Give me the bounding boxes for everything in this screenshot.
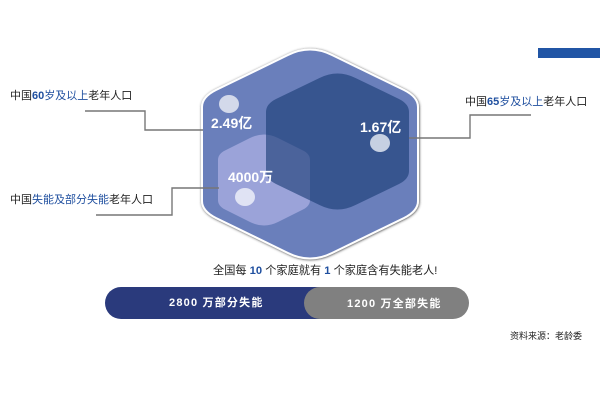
proportion bar: partial disability (105, 287, 335, 319)
source note: 资料来源：老龄委 (510, 331, 582, 341)
proportion bar: full disability (304, 287, 469, 319)
corner accent bar (538, 48, 600, 58)
dot: 1.67亿 (370, 134, 390, 152)
outer hexagon: 60+ population (202, 50, 418, 258)
label: 65+ population: 中国65岁及以上老年人口 (465, 96, 587, 108)
statement text: 全国每 10 个家庭就有 1 个家庭含有失能老人! (213, 265, 437, 277)
value: 2.49亿: 2.49亿 (211, 115, 252, 131)
leader line: 65+ population (409, 115, 531, 138)
dot: 2.49亿 (219, 95, 239, 113)
label: disabled elderly: 中国失能及部分失能老年人口 (10, 194, 153, 206)
text: 1200万全部失能: 1200 万全部失能 (347, 298, 442, 310)
text: 2800万部分失能: 2800 万部分失能 (169, 297, 264, 309)
label: 60+ population: 中国60岁及以上老年人口 (10, 90, 132, 102)
dark hexagon: 65+ population (266, 74, 409, 210)
leader line: 60+ population (85, 111, 203, 130)
hexagon diagram (202, 50, 418, 258)
dot: 4000万 (235, 188, 255, 206)
light hexagon: disabled elderly (218, 134, 310, 226)
value: 1.67亿: 1.67亿 (360, 119, 401, 135)
leader line: disabled elderly (96, 188, 219, 215)
value: 4000万: 4000万 (228, 169, 273, 185)
